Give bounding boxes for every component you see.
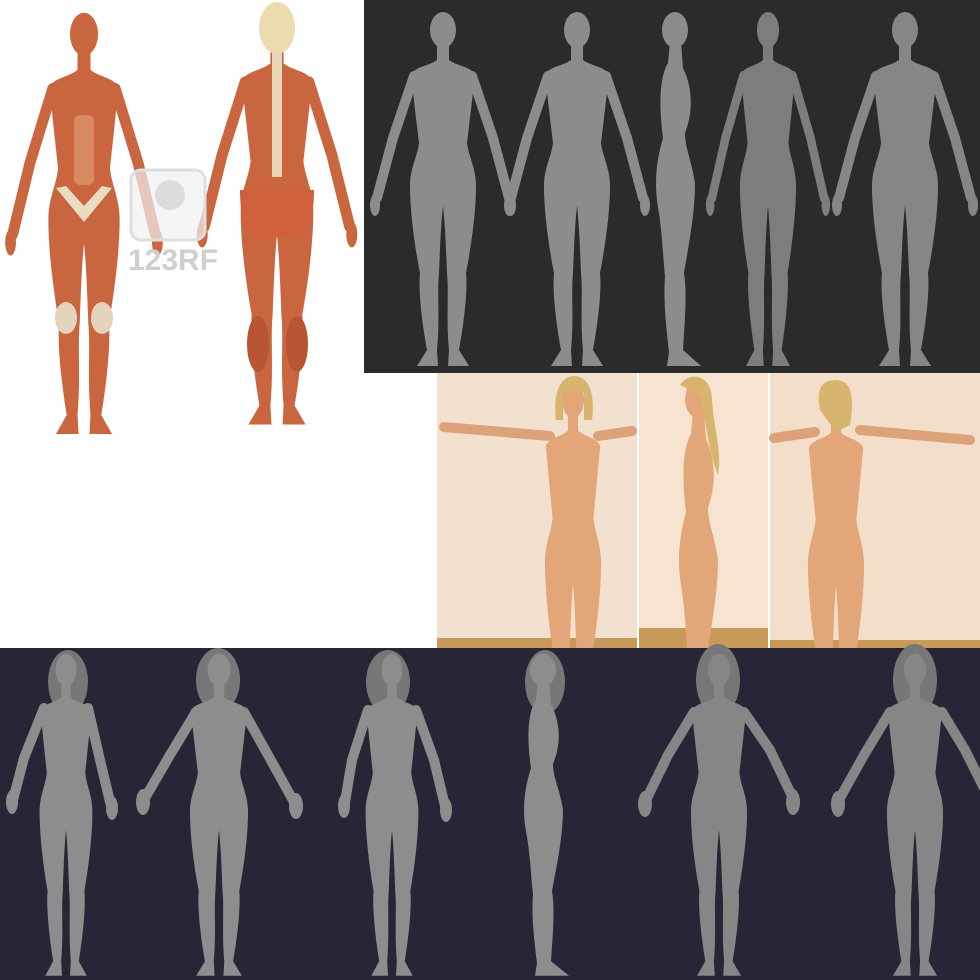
watermark: stock logo: 123RF — [128, 244, 218, 277]
figure: sculpt three-quarter view — [504, 12, 650, 366]
figure: muscle chart front view — [5, 13, 163, 434]
figure: navy sculpt side view — [524, 650, 569, 976]
panel: navy sculpt turnaround — [0, 644, 980, 980]
panel: photo reference — [437, 373, 980, 648]
panel: dark grey sculpt turnaround — [364, 0, 980, 373]
figure: sculpt back view — [832, 12, 978, 366]
figure: sculpt rear three-quarter view — [706, 12, 830, 366]
watermark: stock logo — [128, 170, 218, 277]
figure: photo front pose — [439, 376, 637, 648]
figure: navy sculpt back view — [831, 644, 980, 976]
panel: muscle anatomy chart — [0, 0, 437, 648]
figure: navy sculpt rear three-quarter — [638, 644, 800, 976]
figure: sculpt side view — [656, 12, 701, 366]
figure: photo side pose — [679, 376, 720, 648]
figure: sculpt front view — [370, 12, 516, 366]
figure: muscle chart back view — [197, 2, 357, 424]
figure: navy sculpt front view — [136, 648, 303, 976]
figure: navy sculpt three-quarter left — [6, 650, 118, 976]
figure: photo back pose — [769, 380, 975, 648]
figure: navy sculpt three-quarter right — [338, 650, 452, 976]
